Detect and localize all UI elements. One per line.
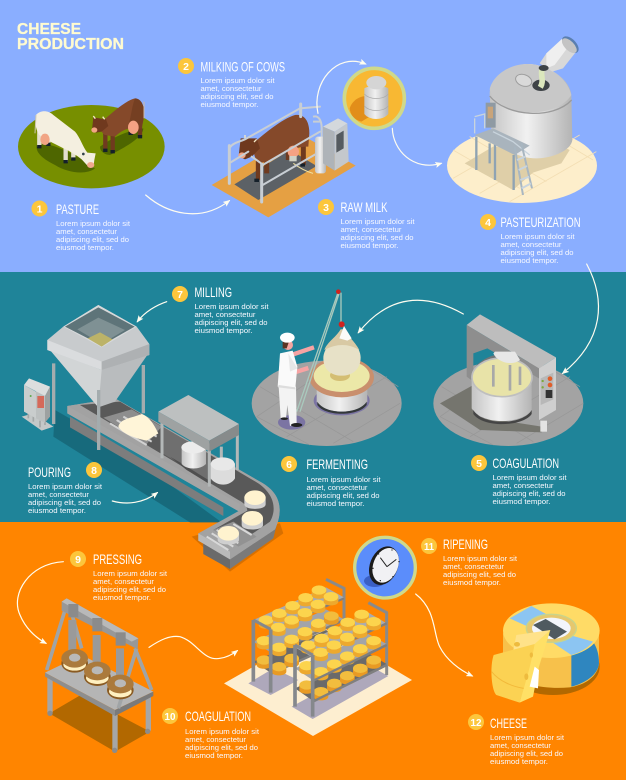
step 4: pasteurization <box>480 214 580 265</box>
text 7 <box>194 302 269 335</box>
text 1: adipiscing elit, sed do <box>56 235 129 244</box>
icon: press table <box>45 598 153 753</box>
illustration: milking station <box>212 104 356 217</box>
text 1: Lorem ipsum dolor sit <box>56 219 131 228</box>
text 11: eiusmod tempor. <box>443 578 501 587</box>
icon: brown cow <box>91 98 144 153</box>
arrow: pasture to milking <box>146 195 229 214</box>
text 10 <box>185 727 260 760</box>
mixer beam back <box>467 314 556 368</box>
step 1: pasture <box>32 200 131 252</box>
step 11: ripening <box>421 536 518 587</box>
text 9 <box>93 569 168 602</box>
text 4: eiusmod tempor. <box>500 256 558 265</box>
step 9: pressing <box>70 551 168 602</box>
text 7: eiusmod tempor. <box>194 326 252 335</box>
platform and ladder <box>475 103 532 195</box>
text 5: adipiscing elit, sed do <box>492 489 566 498</box>
heading 5: COAGULATION <box>492 455 559 471</box>
badge 10: 10 <box>164 711 176 723</box>
heading 2: MILKING OF COWS <box>200 58 285 74</box>
text 5: amet, consectetur <box>492 481 554 490</box>
icon: cheesecloth bag <box>297 289 361 412</box>
text 1: eiusmod tempor. <box>56 243 114 252</box>
arrow: fermenting to milling <box>137 302 167 322</box>
text 11: adipiscing elit, sed do <box>443 570 516 579</box>
badge 7: 7 <box>177 289 183 301</box>
badge 6: 6 <box>286 459 292 471</box>
text 11: Lorem ipsum dolor sit <box>443 554 518 563</box>
heading 10: COAGULATION <box>185 708 251 724</box>
milk stream <box>540 68 542 87</box>
text 6: eiusmod tempor. <box>306 499 364 508</box>
title: PRODUCTION <box>17 36 124 53</box>
text 5: eiusmod tempor. <box>492 497 550 506</box>
text 8 <box>28 482 103 515</box>
badge 11: 11 <box>424 541 434 553</box>
badge 2: 2 <box>183 61 189 73</box>
step 10: coagulation <box>162 708 260 760</box>
text 3: amet, consectetur <box>340 225 402 234</box>
badge 8: 8 <box>91 465 97 477</box>
text 8: eiusmod tempor. <box>28 506 86 515</box>
step 3: raw milk <box>318 199 415 250</box>
text 9: eiusmod tempor. <box>93 593 151 602</box>
text 10: Lorem ipsum dolor sit <box>185 727 260 736</box>
icon: milk can <box>539 33 582 72</box>
step 12: cheese <box>468 714 565 766</box>
arrow: raw milk to pasteurization <box>392 128 441 165</box>
text 5 <box>492 473 567 506</box>
text 2: adipiscing elit, sed do <box>200 92 274 101</box>
text 1: amet, consectetur <box>56 227 117 236</box>
text 7: adipiscing elit, sed do <box>194 318 268 327</box>
text 4: Lorem ipsum dolor sit <box>500 232 575 241</box>
text 3: adipiscing elit, sed do <box>340 233 414 242</box>
control pillar <box>539 357 556 420</box>
text 4 <box>500 232 575 265</box>
icon: cheesemaker <box>278 333 314 427</box>
step 5: coagulation <box>471 455 567 506</box>
heading 8: POURING <box>28 464 71 480</box>
text 2: amet, consectetur <box>200 84 262 93</box>
icon: control cabinets <box>22 378 53 431</box>
icon: cheese wheels on belt <box>218 490 266 544</box>
heading 7: MILLING <box>194 284 232 300</box>
illustration: hopper and conveyor <box>22 305 283 572</box>
cheese wedge <box>491 630 550 703</box>
text 3 <box>340 217 415 250</box>
arrow: coagulation to fermenting <box>358 300 463 333</box>
heading 9: PRESSING <box>93 551 142 567</box>
text 12: eiusmod tempor. <box>490 757 548 766</box>
heading 3: RAW MILK <box>340 199 388 215</box>
icon: fermenting vat <box>309 357 374 414</box>
curd pile <box>118 414 158 441</box>
text 2: eiusmod tempor. <box>200 100 258 109</box>
tank body <box>490 64 572 158</box>
heading 12: CHEESE <box>490 715 527 731</box>
rack 2 <box>295 603 387 717</box>
text 6 <box>306 475 381 508</box>
icon: milking cow <box>238 115 309 182</box>
arrow: ripening to cheese <box>416 594 472 676</box>
icon: clock in circle <box>355 537 415 598</box>
badge 1: 1 <box>37 204 43 216</box>
text 12 <box>490 733 565 766</box>
title: CHEESE <box>17 21 81 38</box>
illustration: pasture with cows <box>18 98 165 188</box>
badge 12: 12 <box>470 717 482 729</box>
text 3: eiusmod tempor. <box>340 241 398 250</box>
text 6: Lorem ipsum dolor sit <box>306 475 381 484</box>
step 8: pouring <box>28 462 103 515</box>
panel: pressing to cheese background <box>0 522 626 780</box>
text 6: amet, consectetur <box>306 483 368 492</box>
title <box>17 21 124 53</box>
illustration: ripening racks <box>224 579 412 736</box>
panel: pasture to pasteurization background <box>0 0 626 272</box>
text 2: Lorem ipsum dolor sit <box>200 76 275 85</box>
text 12: amet, consectetur <box>490 741 551 750</box>
illustration: fermenting station <box>252 289 402 446</box>
step 6: fermenting <box>281 456 381 508</box>
railings <box>229 104 320 202</box>
step 2: milking of cows <box>178 58 285 109</box>
arrow: milking to raw milk <box>317 61 366 113</box>
text 11 <box>443 554 518 587</box>
badge 9: 9 <box>75 554 81 566</box>
text 9: adipiscing elit, sed do <box>93 585 166 594</box>
heading 6: FERMENTING <box>306 456 368 472</box>
text 9: amet, consectetur <box>93 577 154 586</box>
text 4: amet, consectetur <box>500 240 562 249</box>
icon: hopper <box>47 305 149 407</box>
badge 5: 5 <box>476 458 482 470</box>
illustration: pasteurization tank <box>447 33 597 203</box>
icon: cutting table with cylinders <box>158 395 239 487</box>
text 8: amet, consectetur <box>28 490 89 499</box>
rack 1 <box>253 579 344 693</box>
text 10: amet, consectetur <box>185 735 246 744</box>
illustration: cheese press <box>45 598 153 753</box>
badge 3: 3 <box>323 202 329 214</box>
text 2 <box>200 76 275 109</box>
text 10: eiusmod tempor. <box>185 751 243 760</box>
text 7: Lorem ipsum dolor sit <box>194 302 269 311</box>
panel: coagulation to pouring background <box>0 272 626 522</box>
text 4: adipiscing elit, sed do <box>500 248 574 257</box>
text 11: amet, consectetur <box>443 562 504 571</box>
arrow: pasteurization to coagulation <box>563 264 598 373</box>
icon: raw milk tank in circle <box>344 68 404 128</box>
text 8: adipiscing elit, sed do <box>28 498 101 507</box>
text 1 <box>56 219 131 252</box>
bowl <box>472 377 532 421</box>
icon: pressed cheeses <box>61 649 134 699</box>
heading 4: PASTEURIZATION <box>500 214 580 230</box>
arrow: pressing to ripening <box>149 636 237 659</box>
text 10: adipiscing elit, sed do <box>185 743 258 752</box>
badge 4: 4 <box>485 217 491 229</box>
text 5: Lorem ipsum dolor sit <box>492 473 567 482</box>
text 12: adipiscing elit, sed do <box>490 749 563 758</box>
icon: milking cabinet <box>313 116 349 173</box>
conveyor belt <box>67 398 280 569</box>
step 7: milling <box>172 284 269 335</box>
icon: white cow <box>35 111 96 168</box>
heading 1: PASTURE <box>56 201 99 217</box>
arrow: to pouring conveyor <box>112 493 157 503</box>
illustration: cheese wheel <box>491 603 600 703</box>
heading 11: RIPENING <box>443 536 488 552</box>
illustration: coagulation mixer <box>433 314 583 446</box>
text 3: Lorem ipsum dolor sit <box>340 217 415 226</box>
text 12: Lorem ipsum dolor sit <box>490 733 565 742</box>
text 6: adipiscing elit, sed do <box>306 491 380 500</box>
text 9: Lorem ipsum dolor sit <box>93 569 168 578</box>
arrow: pressing loop <box>17 562 63 643</box>
text 8: Lorem ipsum dolor sit <box>28 482 103 491</box>
text 7: amet, consectetur <box>194 310 256 319</box>
